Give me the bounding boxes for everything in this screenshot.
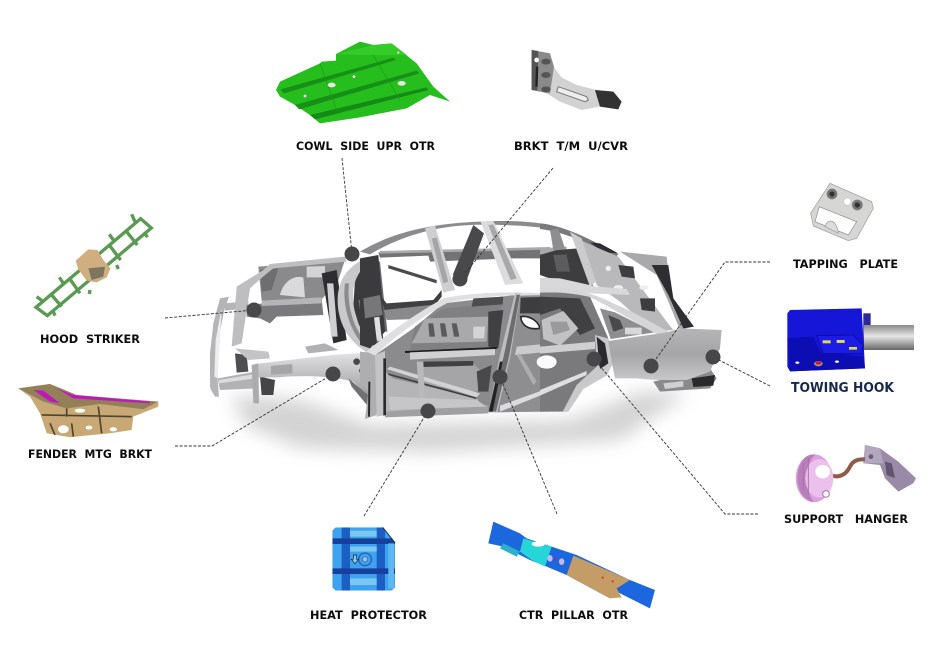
leader lines [165, 158, 770, 516]
part: tapping plate [811, 183, 873, 241]
part: ctr pillar otr [488, 522, 655, 608]
label: fender mtg brkt: FENDER MTG BRKT [28, 447, 152, 461]
label: cowl side upr otr: COWL SIDE UPR OTR [296, 139, 435, 153]
label: ctr pillar otr: CTR PILLAR OTR [519, 608, 628, 622]
part: brkt t/m u/cvr [532, 50, 622, 110]
car body-in-white [210, 221, 722, 452]
part: cowl side upr otr [276, 42, 450, 123]
part: heat protector [330, 525, 397, 592]
part: support hanger [796, 445, 916, 502]
label: support hanger: SUPPORT HANGER [784, 512, 908, 526]
middle of car [360, 221, 555, 419]
marker dots [246, 246, 720, 418]
label: heat protector: HEAT PROTECTOR [310, 608, 427, 622]
label: hood striker: HOOD STRIKER [40, 332, 140, 346]
front end of car [210, 257, 383, 407]
label: tapping plate: TAPPING PLATE [793, 257, 898, 271]
label: brkt t/m u/cvr: BRKT T/M U/CVR [514, 139, 628, 153]
part: hood striker [36, 214, 151, 316]
part: towing hook [787, 308, 914, 371]
part: fender mtg brkt [18, 384, 158, 437]
rear of car [537, 223, 722, 412]
ground shadow [232, 392, 690, 452]
label: towing hook: TOWING HOOK [791, 381, 895, 396]
